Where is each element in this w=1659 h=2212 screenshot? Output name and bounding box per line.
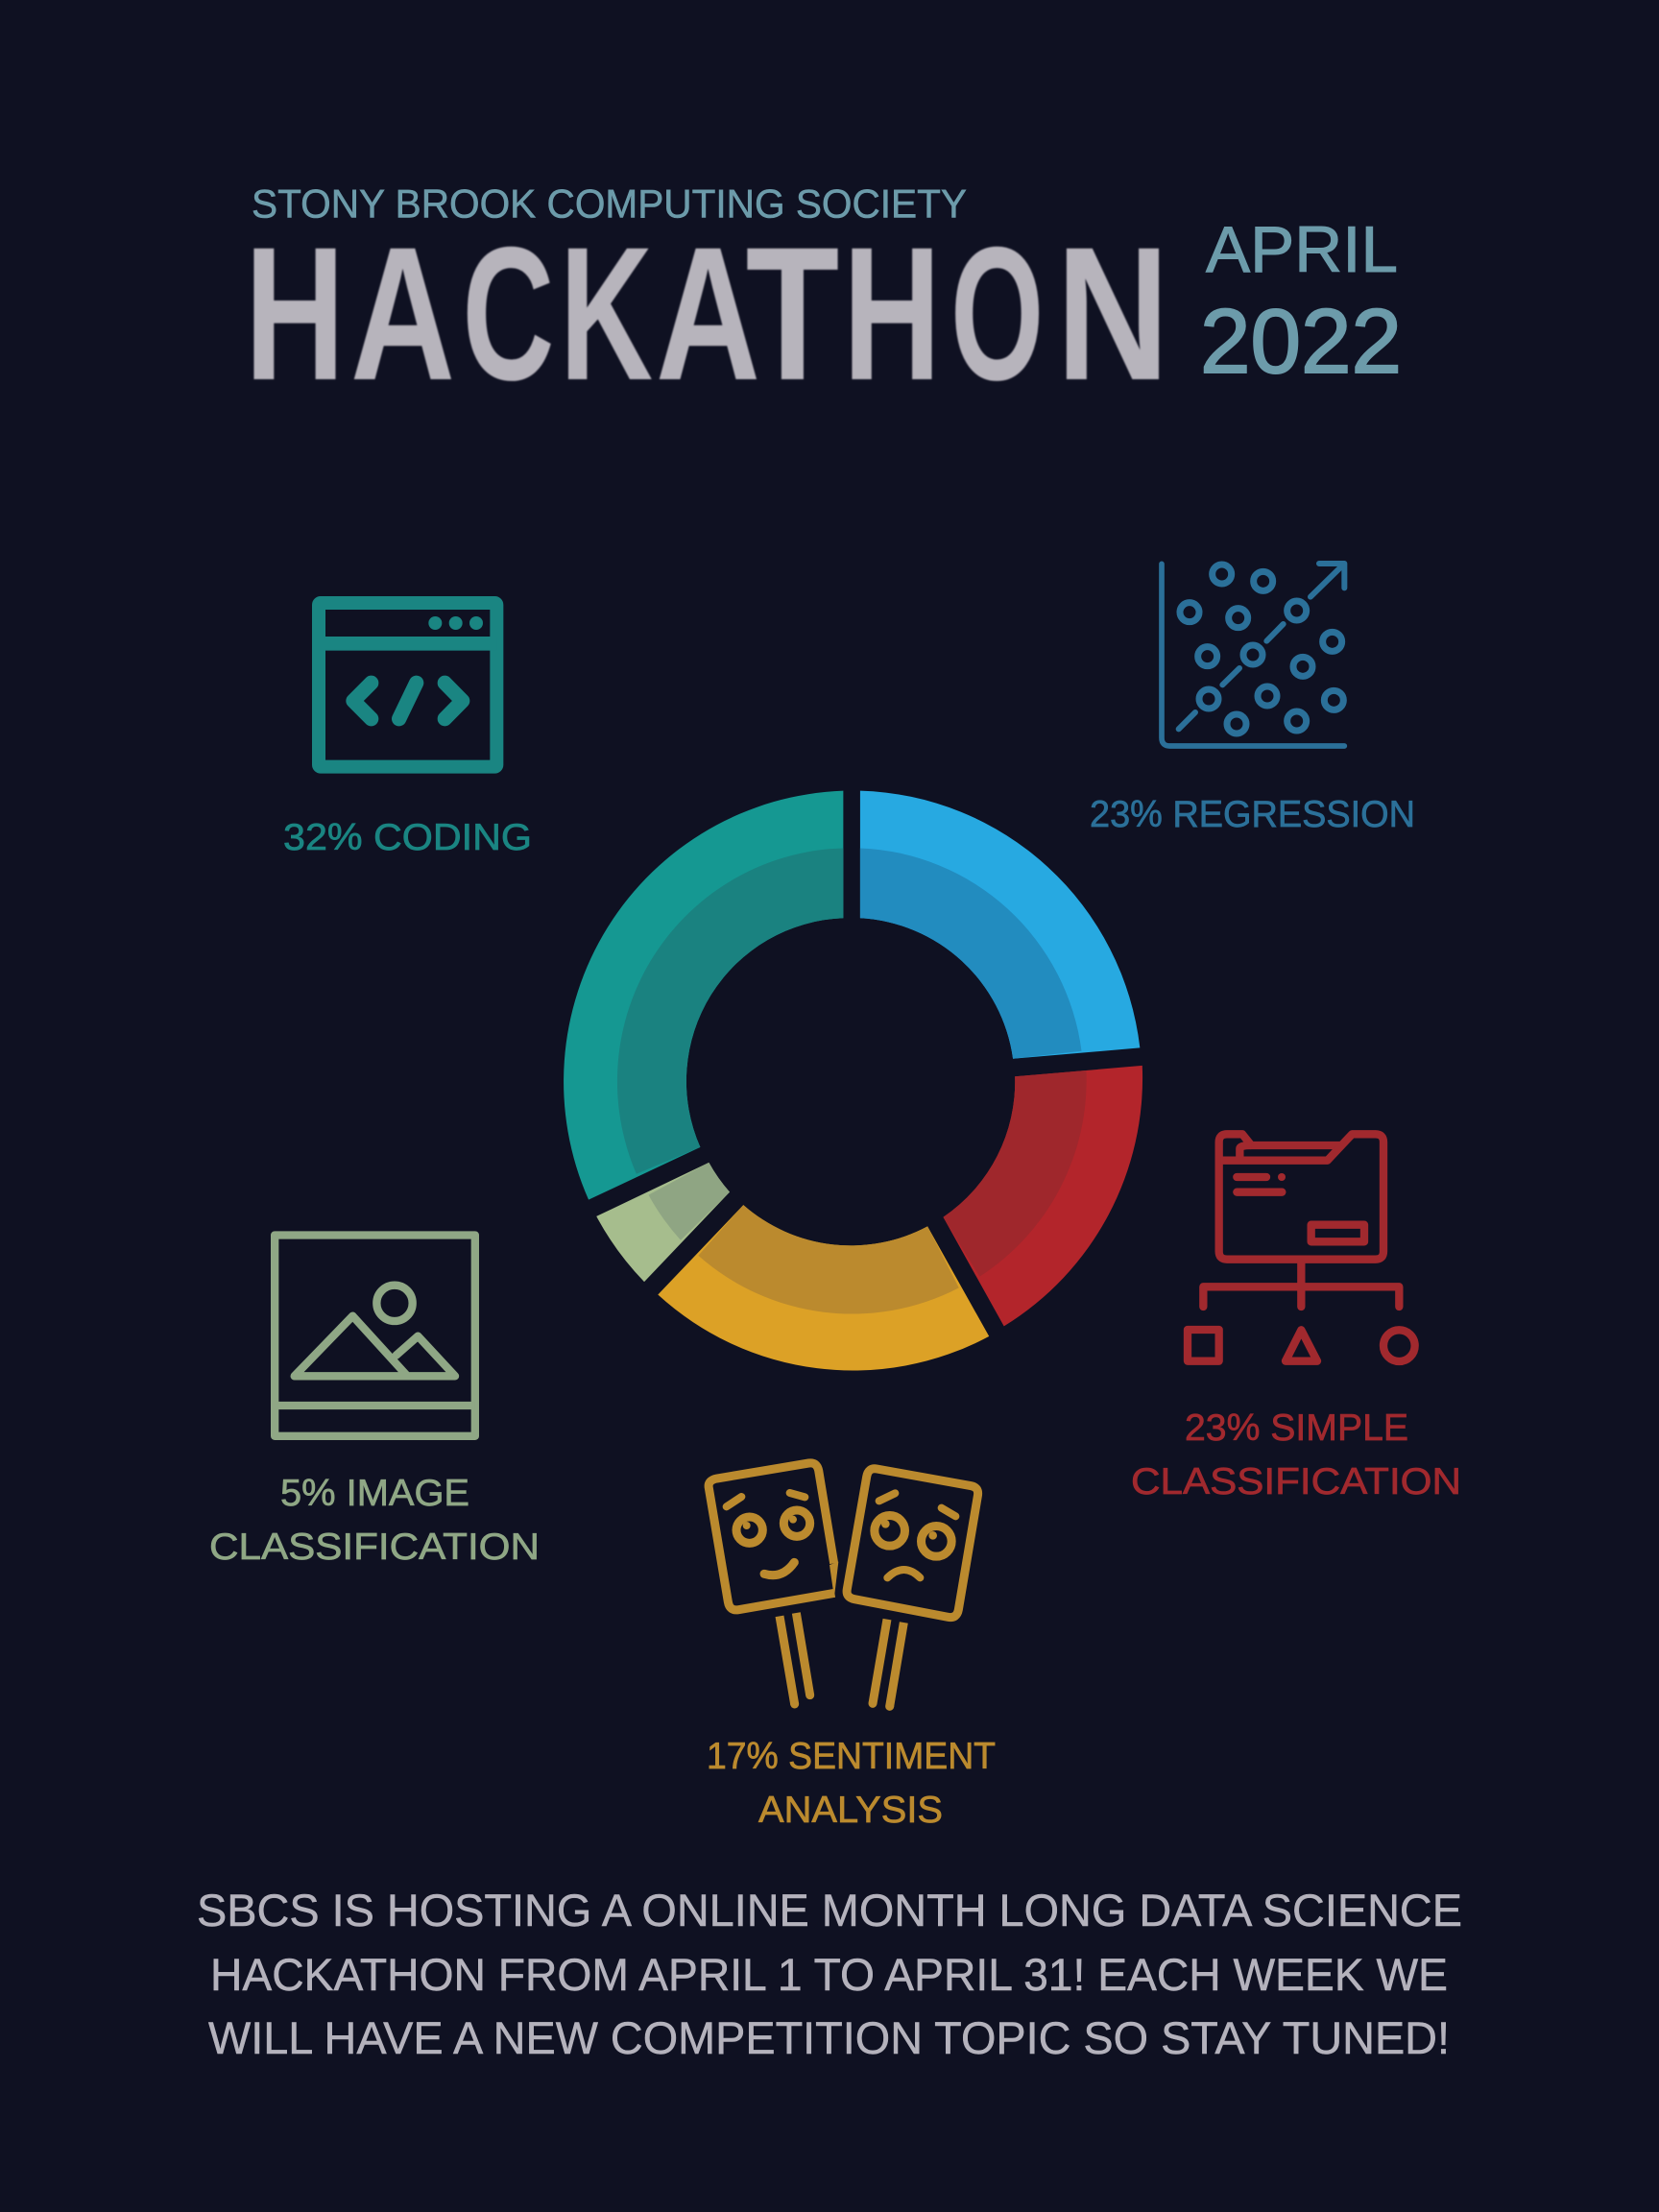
donut chart xyxy=(564,791,1142,1371)
date: year: 2022 xyxy=(1200,291,1402,393)
icon: code window xyxy=(319,603,496,767)
label: regression: 23% REGRESSION xyxy=(1090,794,1415,835)
title: hackathon: N xyxy=(1056,207,1169,420)
title: hackathon: H xyxy=(843,207,941,420)
label: simple classification: 23% SIMPLE xyxy=(1185,1407,1408,1449)
item: sentiment analysis xyxy=(707,1463,996,1831)
title: hackathon xyxy=(245,207,1169,420)
title: hackathon: H xyxy=(245,207,345,420)
icon: happy and sad signs xyxy=(709,1463,978,1711)
title: hackathon: A xyxy=(350,207,455,420)
title: hackathon: O xyxy=(950,207,1044,420)
description text: WILL HAVE A NEW COMPETITION TOPIC SO STAY TUNED! xyxy=(208,2012,1450,2063)
title: hackathon: C xyxy=(462,207,554,420)
description text: HACKATHON FROM APRIL 1 TO APRIL 31! EACH WEEK WE xyxy=(210,1949,1448,2000)
label: coding: 32% CODING xyxy=(283,817,532,858)
description text xyxy=(197,1885,1462,2063)
icon: picture frame xyxy=(275,1235,475,1436)
label: image classification xyxy=(209,1473,540,1568)
label: simple classification xyxy=(1131,1407,1461,1503)
description text: SBCS IS HOSTING A ONLINE MONTH LONG DATA SCIENCE xyxy=(197,1885,1462,1936)
segment: regression 23% xyxy=(860,791,1140,1059)
segment: image classification 5% xyxy=(596,1163,730,1282)
organizer line: STONY BROOK COMPUTING SOCIETY xyxy=(252,180,967,227)
item: coding xyxy=(283,603,532,858)
item: image classification xyxy=(209,1235,540,1568)
date: month: APRIL xyxy=(1206,213,1398,286)
segment: coding 32% xyxy=(564,791,843,1200)
icon: scatter plot with trend arrow xyxy=(1162,564,1344,746)
header xyxy=(245,180,1402,420)
segment: sentiment analysis 17% xyxy=(658,1205,989,1371)
label: sentiment analysis xyxy=(707,1736,996,1831)
label: image classification: 5% IMAGE xyxy=(280,1473,469,1514)
item: simple classification xyxy=(1131,1134,1461,1503)
label: sentiment analysis: ANALYSIS xyxy=(758,1790,943,1831)
segment: simple classification 23% xyxy=(943,1066,1142,1326)
title: hackathon: A xyxy=(656,207,760,420)
icon: folder hierarchy xyxy=(1188,1134,1415,1361)
label: image classification: CLASSIFICATION xyxy=(209,1527,540,1568)
item: regression xyxy=(1090,564,1415,835)
title: hackathon: K xyxy=(560,207,653,420)
label: sentiment analysis: 17% SENTIMENT xyxy=(707,1736,996,1777)
title: hackathon: T xyxy=(746,207,839,420)
label: simple classification: CLASSIFICATION xyxy=(1131,1461,1461,1503)
